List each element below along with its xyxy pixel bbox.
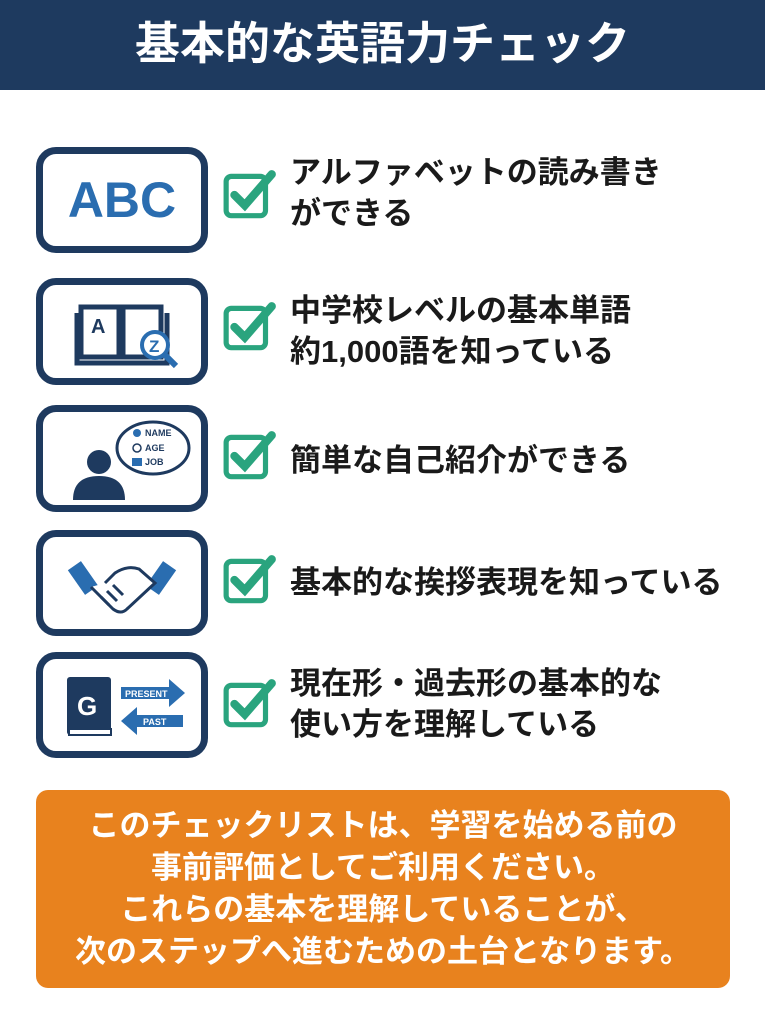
icon box: grammar: PAST [143, 717, 167, 727]
text 4: 基本的な挨拶表現を知っている [290, 565, 722, 600]
icon box: ABC: ABC [68, 172, 176, 228]
callout note [36, 790, 730, 988]
icon box: self intro: JOB [145, 457, 164, 467]
check 5 [224, 679, 276, 728]
text 1 [290, 155, 662, 231]
text 3: 簡単な自己紹介ができる [290, 443, 630, 478]
text 2: 中学校レベルの基本単語 [290, 293, 631, 328]
title [0, 0, 765, 90]
text 1: アルファベットの読み書き [290, 155, 662, 190]
icon box: grammar [36, 652, 208, 758]
text 2: 約1,000語を知っている [290, 334, 614, 369]
check 1 [224, 170, 276, 218]
icon box: dictionary: Z [149, 337, 159, 356]
title: 基本的な英語力チェック [135, 18, 630, 69]
check 2 [224, 302, 276, 350]
text 2 [290, 293, 631, 369]
callout note: 次のステップへ進むための土台となります。 [75, 934, 691, 969]
icon box: self intro [36, 405, 208, 512]
icon box: grammar: PRESENT [125, 689, 168, 699]
icon box: dictionary [36, 278, 208, 385]
text 5: 現在形・過去形の基本的な [290, 666, 662, 701]
icon box: dictionary: A [91, 316, 105, 338]
callout note: 事前評価としてご利用ください。 [151, 850, 615, 885]
icon box: self intro: NAME [145, 428, 172, 438]
check 4 [224, 555, 276, 604]
check 3 [224, 431, 276, 480]
callout note: これらの基本を理解していることが、 [120, 892, 646, 927]
text 1: ができる [290, 196, 413, 231]
callout note: このチェックリストは、学習を始める前の [88, 808, 678, 843]
icon box: grammar: G [77, 691, 97, 721]
icon box: handshake [36, 530, 208, 636]
icon box: self intro: AGE [145, 443, 165, 453]
text 5 [290, 666, 662, 742]
icon box: ABC [36, 147, 208, 253]
text 5: 使い方を理解している [290, 707, 599, 742]
